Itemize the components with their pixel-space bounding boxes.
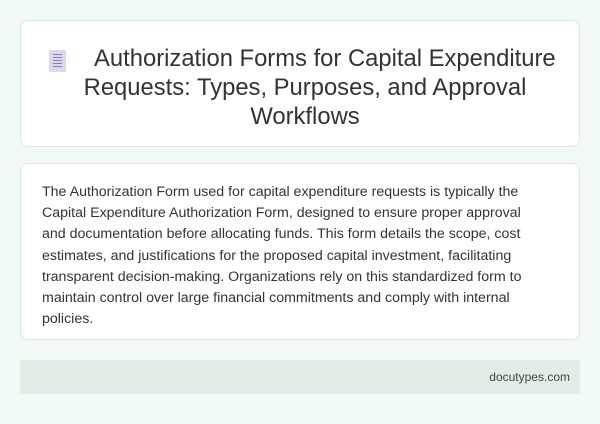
title: Workflows xyxy=(250,103,360,130)
title: Authorization Forms for Capital Expenditure xyxy=(94,45,556,72)
title: Requests: Types, Purposes, and Approval xyxy=(84,74,526,101)
text block: The Authorization Form used for capital expenditure requests is typically the Capital Expenditure Authorization Form, designed to ensure proper approval and documentation before allocating funds. This form details the scope, cost estimates, and justifications for the proposed capital investment, facilitating transparent decision-making. Organizations rely on this standardized form to maintain control over large financial commitments and comply with internal policies. xyxy=(42,184,521,327)
footer xyxy=(20,360,580,394)
footer text: docutypes.com xyxy=(489,370,570,384)
panel: title xyxy=(20,20,580,147)
title xyxy=(84,45,556,130)
panel: description xyxy=(20,163,580,340)
icon: document xyxy=(49,50,66,72)
